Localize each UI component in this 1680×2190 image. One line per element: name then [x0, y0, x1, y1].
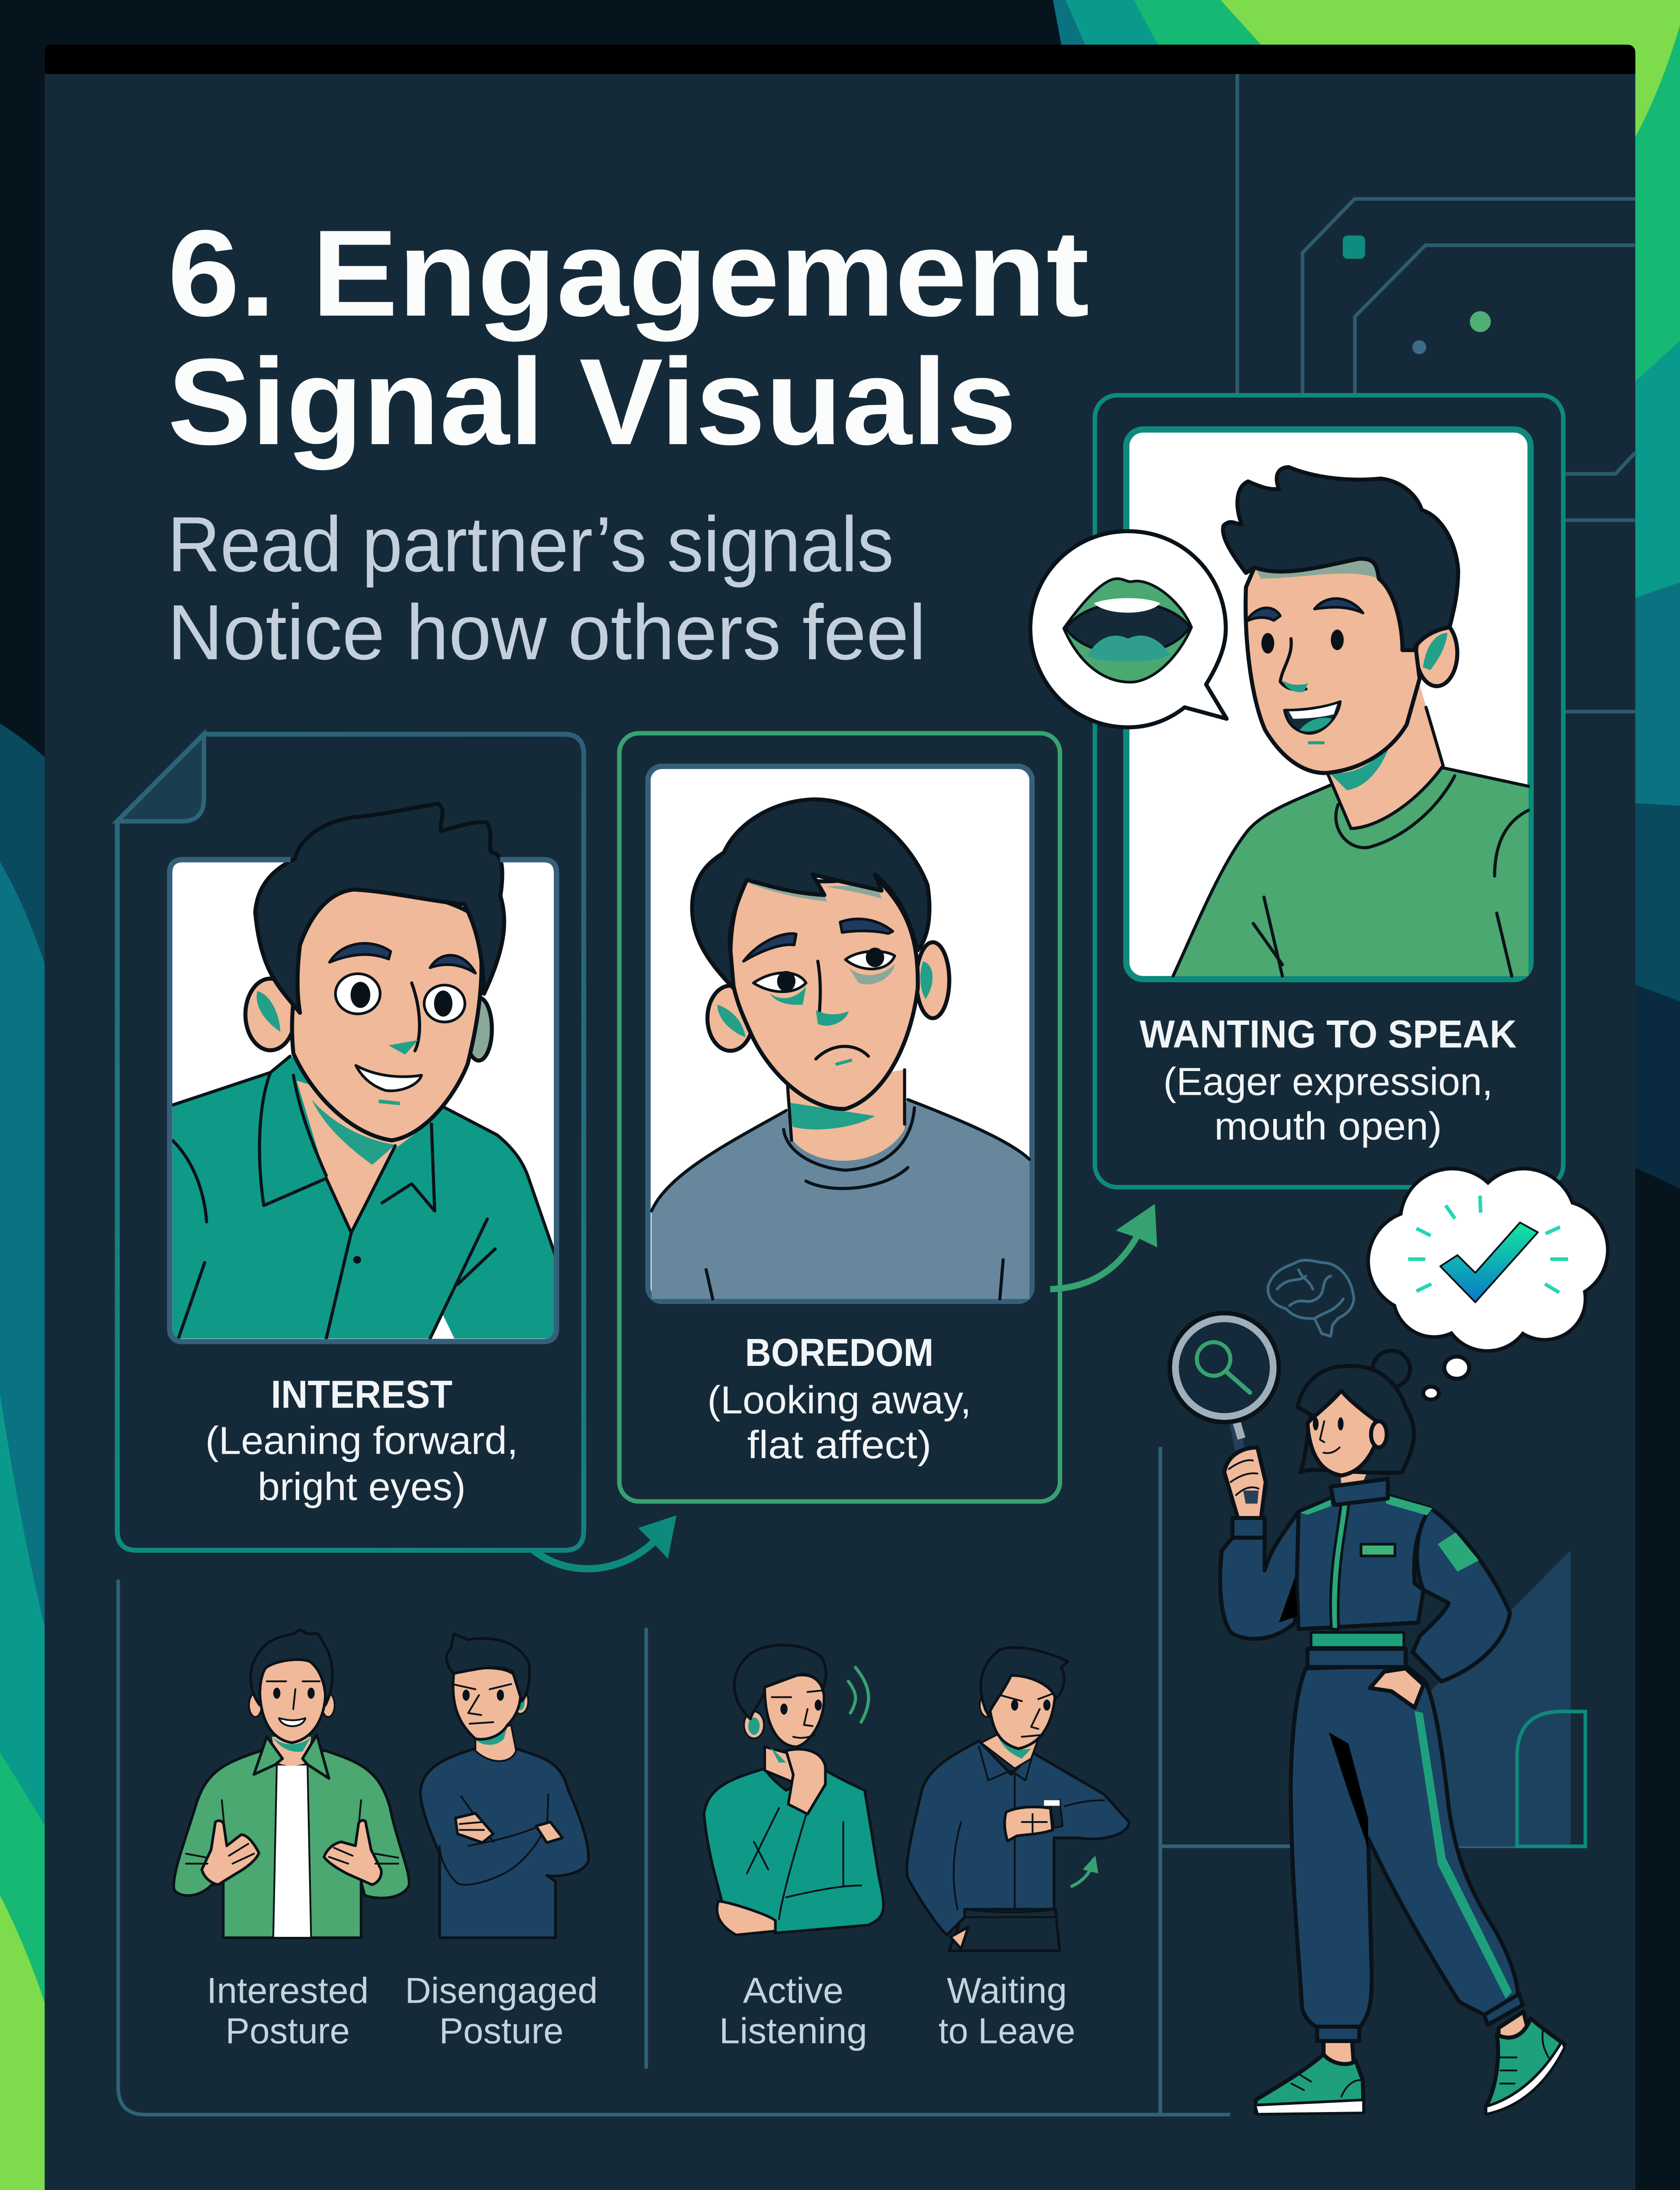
collar and neck: [1340, 1466, 1370, 1486]
title: 6. Engagement: [168, 205, 1089, 342]
caption: interest: bright eyes): [258, 1465, 466, 1508]
subtitle: Read partner’s signals: [168, 501, 894, 588]
caption: posture labels: Interested: [207, 1970, 369, 2011]
caption: wanting to speak: (Eager expression,: [1163, 1060, 1493, 1103]
arrow: boredom to speak: [1050, 1204, 1157, 1289]
title: Signal Visuals: [168, 333, 1017, 471]
figure: active listening: [704, 1645, 883, 1935]
subtitle: Notice how others feel: [168, 588, 926, 676]
caption: posture labels: to Leave: [939, 2011, 1075, 2052]
subtitle: [168, 501, 926, 676]
caption: posture labels: Waiting: [947, 1970, 1067, 2011]
panel: wanting to speak: [1095, 395, 1563, 1187]
caption: boredom: flat affect): [747, 1423, 931, 1467]
arrow: interest to boredom: [534, 1516, 676, 1569]
caption: posture labels: [207, 1970, 1075, 2052]
caption: wanting to speak: [1140, 1013, 1516, 1148]
pants: [1291, 1665, 1518, 2028]
caption: interest: [205, 1373, 518, 1508]
caption: posture labels: Active: [743, 1970, 844, 2011]
caption: wanting to speak: mouth open): [1214, 1105, 1442, 1148]
figure: interested posture: [174, 1630, 409, 1938]
icon: magnifying glass: [1173, 1317, 1275, 1504]
thought cloud with check mark: [1370, 1171, 1606, 1400]
title: [168, 205, 1089, 471]
panel: boredom: [619, 733, 1060, 1501]
caption: posture labels: Posture: [225, 2011, 350, 2052]
jacket: [1297, 1495, 1430, 1629]
posture figures: [174, 1630, 1129, 1951]
hand gripping the magnifier: [1224, 1447, 1266, 1518]
shoes: [1256, 2054, 1364, 2113]
icon: dog-ear fold: [117, 734, 204, 821]
person: bored man: [651, 799, 1030, 1299]
circuit line decoration: [1237, 74, 1635, 712]
photo frame: interest: [170, 860, 556, 1342]
person: speaking man: [1173, 467, 1529, 976]
icon: brain outline: [1268, 1260, 1354, 1336]
caption: posture labels: Disengaged: [405, 1970, 598, 2011]
waistband: [1307, 1649, 1406, 1667]
panel: interest: [117, 734, 584, 1551]
icon: check mark: [1440, 1222, 1538, 1302]
person: interested man: [172, 804, 555, 1339]
speech bubble with lips: [1030, 531, 1227, 727]
caption: interest: INTEREST: [271, 1373, 452, 1417]
bottom frame and background shapes: [118, 1447, 1585, 2115]
figure: waiting to leave: [907, 1648, 1129, 1951]
caption: wanting to speak: WANTING TO SPEAK: [1140, 1013, 1516, 1056]
caption: boredom: (Looking away,: [707, 1378, 971, 1422]
person: woman with magnifier: [1220, 1351, 1564, 2114]
caption: boredom: [707, 1331, 971, 1467]
caption: posture labels: Posture: [439, 2011, 564, 2052]
caption: boredom: BOREDOM: [745, 1331, 934, 1374]
head: [1373, 1351, 1410, 1387]
figure: disengaged posture: [420, 1634, 588, 1938]
caption: interest: (Leaning forward,: [205, 1419, 518, 1462]
caption: posture labels: Listening: [719, 2011, 867, 2052]
